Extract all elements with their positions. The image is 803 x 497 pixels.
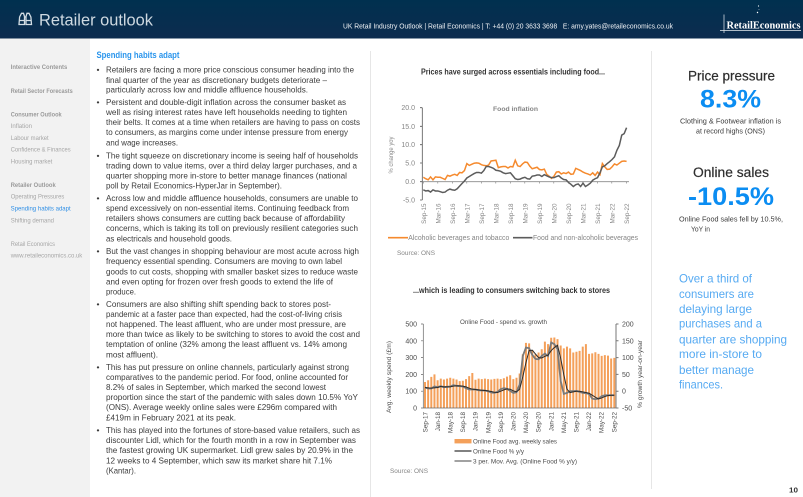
x axis labels: Sep-22 [624, 203, 631, 224]
bullet 3 [96, 150, 358, 190]
legend [388, 235, 638, 242]
bullet 5: and even opting for frozen over fresh goods to extend the life of [106, 276, 334, 286]
bullet 2 [96, 97, 360, 148]
callout: over a third of consumers: quarter are shopping [679, 332, 787, 346]
panel: sidebar navigation: Shifting demand [11, 219, 54, 225]
panel: sidebar navigation: www.retaileconomics.co.uk [10, 254, 83, 260]
right axis labels: 100 [622, 355, 634, 362]
stat: price pressure: at record highs (ONS) [696, 128, 765, 136]
legend: Online Food avg. weekly sales [473, 438, 558, 446]
bullet 8: This has played into the fortunes of store-based value retailers, such as [106, 425, 360, 435]
panel: sidebar navigation: Confidence & Finances [11, 148, 71, 154]
source: Source: ONS [390, 468, 428, 475]
left axis labels: 100 [405, 389, 417, 396]
logo: Retail Economics: RetailEconomics [726, 20, 801, 32]
panel: sidebar navigation: Retailer Outlook [11, 183, 56, 189]
source: Source: ONS [397, 250, 435, 257]
chart title: Online Food - spend vs. growth [460, 319, 547, 326]
stat: online sales [679, 165, 783, 234]
panel: sidebar navigation: Retail Economics [11, 242, 55, 248]
right axis labels: 50 [622, 372, 630, 379]
x axis labels: Mar-17 [464, 203, 472, 223]
stat: online sales: -10.5% [688, 183, 774, 211]
panel: sidebar navigation: Operating Pressures [11, 195, 64, 201]
panel: sidebar navigation: Labour market [11, 136, 49, 142]
legend [454, 438, 577, 466]
x axis labels: Mar-20 [552, 203, 558, 223]
x axis labels: Jan-18 [435, 412, 442, 431]
bullet 6: most affluent). [106, 349, 158, 359]
bullet 4: • [96, 193, 100, 203]
panel: sidebar navigation: Inflation [11, 124, 32, 130]
bullet 5: goods to cut costs, shopping with smaller basket sizes to reduce waste [106, 266, 358, 276]
panel: sidebar navigation: Spending habits adapt [11, 207, 71, 213]
x axis labels: May-21 [561, 412, 568, 433]
x axis labels: Jan-19 [473, 412, 480, 431]
left axis labels [405, 322, 417, 412]
y axis labels: 0.0 [405, 179, 415, 186]
bullet 6: • [96, 299, 100, 309]
right axis labels: 0 [622, 389, 626, 396]
bullet 7: This has put pressure on online channels, particularly against strong [106, 362, 349, 372]
x axis labels: Sep-19 [537, 203, 544, 224]
y axis labels: 10.0 [401, 142, 415, 149]
bullet 6: pandemic at a faster pace than expected, had the cost-of-living crisis [106, 309, 342, 319]
bullet 7: 8.2% of sales in September, which marked the second lowest [106, 382, 327, 392]
header contact details: UK Retail Industry Outlook | Retail Economics | T: +44 (0) 20 3633 3698 E: amy.yates@retaileconomics.co.uk [343, 24, 673, 30]
icon: binoculars [19, 13, 32, 24]
panel: main text [96, 50, 360, 475]
bullet 3: The tight squeeze on discretionary income is seeing half of households [106, 150, 358, 160]
bullet 6 [96, 299, 360, 359]
bullet 4: concerns, which is taking its toll on previously resilient categories such [106, 223, 358, 233]
right axis labels [622, 322, 634, 412]
left axis labels: 200 [405, 372, 417, 379]
bullet 7: £419m in February 2021 at its peak. [106, 412, 236, 422]
bullet 3: poll by Retail Economics-HyperJar in September). [106, 180, 282, 190]
callout: over a third of consumers: consumers are [679, 287, 754, 301]
bullet 2: Persistent and double-digit inflation across the consumer basket as [106, 97, 346, 107]
legend: Food and non-alcoholic beverages [533, 235, 638, 242]
bullet 1: • [96, 65, 100, 75]
bullet 8: 12 weeks to 4 September, which saw its market share hit 7.1% [106, 455, 332, 465]
callout: over a third of consumers: finances. [679, 378, 723, 392]
bullet 7: (ONS). Average weekly online sales were £296m compared with [106, 402, 337, 412]
bullet 5: produce. [106, 286, 136, 296]
callout: over a third of consumers [679, 272, 787, 392]
bullet 7: proportion since the start of the pandemic with sales down 10.5% YoY [106, 392, 358, 402]
bullet 7 [96, 362, 358, 422]
y axis labels: 5.0 [405, 160, 415, 168]
series: three period moving average [425, 345, 614, 399]
bullet 1 [96, 65, 354, 95]
stat: price pressure: Clothing & Footwear inflation is [680, 118, 782, 126]
bullet 1: Retailers are facing a more price conscious consumer heading into the [106, 65, 354, 75]
x axis labels: Sep-15 [421, 203, 428, 224]
bullet 8: (Kantar). [106, 465, 136, 475]
x axis labels: Mar-21 [580, 203, 588, 223]
left axis labels: 500 [405, 322, 417, 328]
callout: over a third of consumers: delaying large [679, 302, 752, 316]
x axis labels: Mar-18 [494, 203, 500, 223]
x axis labels: Sep-22 [611, 412, 618, 432]
bullet 2: • [96, 97, 100, 107]
bullet 6: Consumers are also shifting shift spending back to stores post- [106, 299, 331, 309]
left axis title: Avg. weekly spend (£m) [386, 341, 393, 413]
x axis labels: Mar-16 [436, 203, 442, 223]
stat: price pressure: 8.3% [700, 86, 761, 114]
logo: Retail Economics [720, 5, 801, 33]
x axis labels: Sep-17 [479, 203, 486, 224]
bullet 4: as electricals and household goods. [106, 233, 232, 243]
bullet 2: and wage increases. [106, 138, 178, 148]
heading: chart one: Prices have surged across essentials including food... [421, 68, 605, 76]
combo chart: online food spend vs growth [386, 319, 644, 475]
panel: sidebar navigation: Interactive Contents [11, 65, 68, 71]
bullet 3: trading down to value items, over a third delay larger purchases, and a [106, 160, 357, 170]
legend: 3 per. Mov. Avg. (Online Food % y/y) [473, 458, 577, 466]
legend: Online Food % y/y [473, 448, 525, 456]
x axis labels: Jan-21 [548, 412, 555, 431]
x axis labels: Jan-20 [510, 412, 518, 431]
bullet 7: comparatives to the pandemic period. For food, online accounted for [106, 372, 348, 382]
series: food and non-alcoholic beverages [423, 128, 627, 192]
bullet 5: frequency essential spending. Consumers are moving to own label [106, 256, 342, 266]
x axis labels: Sep-20 [566, 203, 573, 224]
x axis labels: Sep-18 [460, 412, 467, 432]
bullet 1: particularly across low and middle affluence households. [106, 85, 308, 95]
x axis labels: Mar-22 [610, 203, 616, 223]
legend: Alcoholic beverages and tobacco [408, 235, 509, 242]
bullet 2: their belts. It comes at a time when retailers are having to pass on costs [106, 117, 360, 127]
stat: online sales: YoY in [691, 226, 710, 234]
stat: online sales: Online Food sales fell by 10.5%, [679, 216, 783, 224]
callout: over a third of consumers: Over a third of [679, 272, 753, 286]
bullet 8 [96, 425, 360, 475]
bullet 5: But the vast changes in shopping behaviour are most acute across high [106, 246, 359, 256]
callout: over a third of consumers: purchases and a [679, 316, 762, 330]
panel: sidebar navigation: Consumer Outlook [11, 112, 62, 118]
bullet 8: the fastest growing UK supermarket. Lidl grew sales by 20.9% in the [106, 445, 353, 455]
left axis labels: 400 [405, 338, 417, 345]
bullet 2: well as rising interest rates have left households needing to tighten [105, 107, 347, 117]
x axis labels: May-18 [448, 412, 454, 433]
x axis labels: Jan-22 [586, 412, 593, 431]
panel: sidebar navigation [0, 38, 90, 497]
x axis labels: Sep-18 [508, 203, 515, 224]
page number: 10 [789, 488, 798, 494]
bullet 1: final quarter of the year as discretionary budgets deteriorate – [106, 75, 327, 85]
x axis labels: May-22 [599, 412, 606, 433]
panel: sidebar navigation: Retail Sector Forecasts [11, 89, 73, 95]
left axis labels: 0 [413, 406, 417, 412]
panel: key stats [679, 68, 783, 234]
x axis labels: Sep-21 [574, 412, 580, 432]
bullet 4: retailers shows consumers are cutting back because of affordability [106, 213, 346, 223]
x axis labels: May-19 [485, 412, 492, 433]
heading: chart two: ...which is leading to consumers switching back to stores [413, 286, 610, 295]
bullet 7: • [96, 362, 100, 372]
x axis labels: Sep-16 [450, 203, 457, 224]
right axis labels: 200 [622, 322, 634, 328]
bullet 4: spend excessively on non-essential items. Continuing feedback from [106, 203, 349, 213]
bullet 5: • [96, 246, 100, 256]
bullet 3: • [96, 150, 100, 160]
bullet 4: Across low and middle affluence households, consumers are unable to [106, 193, 358, 203]
bullet 6: not happened. The least affluent, who are under most pressure, are [106, 319, 346, 329]
series: online food percent y/y [425, 342, 614, 399]
line chart: food inflation [388, 105, 638, 257]
x axis labels: Sep-21 [595, 203, 602, 224]
chart title: Food inflation [493, 106, 538, 113]
bullet 6: more than twice as likely to be switching to stores to avoid the cost and [106, 329, 360, 339]
heading: spending habits adapt: Spending habits adapt [96, 50, 180, 60]
bullet 5 [96, 246, 359, 296]
x axis labels: May-20 [523, 412, 530, 433]
callout: over a third of consumers: better manage [679, 363, 754, 377]
bars: weekly sales [425, 337, 614, 408]
stat: price pressure [680, 68, 782, 136]
bullet 2: to consumers, as margins come under intense pressure from energy [106, 127, 349, 137]
y axis labels: 15.0 [401, 124, 415, 131]
x axis labels: Sep-19 [498, 412, 505, 432]
right axis labels: 150 [622, 338, 634, 345]
left axis labels: 300 [405, 355, 417, 362]
header band [0, 0, 803, 38]
panel: sidebar navigation: Housing market [11, 159, 53, 165]
y axis title: % change yoy [388, 136, 395, 174]
y axis labels: 20.0 [401, 105, 415, 112]
x axis labels: Mar-19 [522, 203, 530, 223]
series: alcoholic beverages and tobacco [423, 160, 627, 180]
right axis title: % growth year-on-year [637, 339, 644, 408]
right axis labels: -50 [622, 406, 632, 412]
x axis labels [421, 203, 631, 224]
bullet 8: • [96, 425, 100, 435]
y axis labels [401, 105, 415, 204]
y axis labels: -5.0 [403, 198, 415, 204]
stat: price pressure: Price pressure [688, 68, 775, 84]
bullet 8: discounter Lidl, which for the fourth month in a row in September was [106, 435, 356, 445]
stat: online sales: Online sales [693, 165, 769, 180]
bullet 6: temptation of online (32% among the least affluent vs. 14% among [106, 339, 347, 349]
bullet 3: quarter shopping more in-store to better manage finances (national [106, 170, 347, 180]
header title: Retailer outlook [39, 10, 153, 30]
x axis labels: Sep-20 [536, 412, 543, 432]
x axis labels: Sep-17 [422, 412, 429, 432]
bullet 4 [96, 193, 358, 243]
callout: over a third of consumers: more in-store to [679, 347, 762, 361]
x axis labels [422, 412, 618, 433]
